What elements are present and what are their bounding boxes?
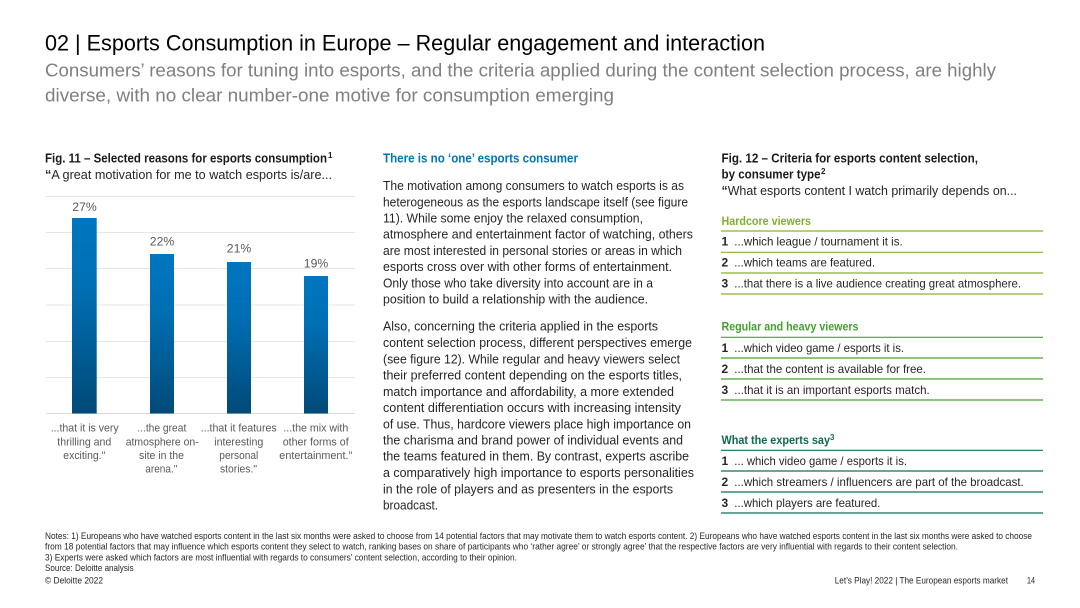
value labels: 19% [304,257,328,271]
figure 12 heading [722,151,1017,198]
bar: 19% [304,276,328,414]
figure 12 heading: Fig. 12 – Criteria for esports content selection, [722,151,978,165]
paragraph 2: match importance and affordability, a more extended [383,384,674,399]
list: what the experts say: 1 [722,454,728,468]
paragraph 1: atmosphere and entertainment factor of watching, others [383,227,693,242]
notes: from 18 potential factors that may influence which esports content they select to watch, ranking bases on share of participants who ‘rather agree’ or strongly agree’ that the respective factors are very influential with regards to their content selection. [45,541,958,552]
list: what the experts say: What the experts say [722,433,830,447]
list: hardcore viewers: 3 [722,277,728,291]
category label 3 [201,423,277,476]
category label 4: entertainment." [279,450,352,462]
footer report name: Let’s Play! 2022 | The European esports market [835,575,1008,586]
paragraph 2: (see figure 12). While regular and heavy viewers select [383,351,680,366]
list: regular and heavy viewers: ...which video game / esports it is. [734,341,904,355]
category label 2: atmosphere on- [126,436,199,448]
list: what the experts say: 3 [830,433,835,442]
list: regular and heavy viewers: ...that the content is available for free. [734,362,926,376]
value labels: 21% [227,242,251,256]
paragraph 1: The motivation among consumers to watch esports is as [383,178,684,193]
list: hardcore viewers: Hardcore viewers [722,214,811,228]
paragraph 2: the charisma and brand power of individual events and [383,433,683,448]
paragraph 2: the teams featured in them. By contrast, experts ascribe [383,449,689,464]
list: what the experts say: ...which streamers / influencers are part of the broadcast. [734,475,1024,489]
paragraph 2: Also, concerning the criteria applied in the esports [383,319,658,334]
paragraph 2: broadcast. [383,497,438,512]
category label 3: interesting [214,436,263,448]
figure 11 heading [45,151,333,182]
bar chart [46,196,355,476]
category label 3: stories." [220,464,257,476]
category label 4: other forms of [283,436,349,448]
list: hardcore viewers: ...that there is a live audience creating great atmosphere. [734,277,1021,291]
footer copyright: © Deloitte 2022 [45,575,103,586]
paragraph 1 [383,178,693,307]
figure 12 heading: “What esports content I watch primarily depends on... [722,184,1017,198]
figure 12 heading: 2 [821,167,826,176]
figure 12 heading: by consumer type [722,168,820,182]
paragraph 1: Only those who take diversity into account are in a [383,275,654,290]
value labels: 22% [150,234,174,248]
category label 4: ...the mix with [283,423,348,435]
category label 2 [126,423,199,476]
notes: 3) Experts were asked which factors are most influential with regards to consumers’ content selection, according to their opinion. [45,551,517,562]
bar: 27% [72,218,97,414]
category label 1 [51,423,119,462]
bar: 21% [227,262,251,414]
text heading: There is no ‘one’ esports consumer [383,152,578,166]
list: what the experts say: ... which video game / esports it is. [734,454,907,468]
paragraph 2: in the role of players and as presenters in the esports [383,481,673,496]
panel: explanatory text [383,152,694,512]
paragraph 2: of use. Thus, hardcore viewers place high importance on [383,416,691,431]
category label 1: ...that it is very [51,423,119,435]
paragraph 1: are most interested in personal stories or areas in which [383,243,682,258]
list: regular and heavy viewers [721,320,1043,400]
paragraph 2: a comparatively high importance to esports personalities [383,465,694,480]
figure 11 heading: “A great motivation for me to watch esports is/are... [45,168,332,182]
category label 4 [279,423,352,462]
list: regular and heavy viewers: 2 [722,362,728,376]
list: regular and heavy viewers: 1 [722,341,728,355]
subtitle [45,60,997,106]
paragraph 2: content selection process, different perspectives emerge [383,335,692,350]
category label 2: site in the [139,450,184,462]
list: hardcore viewers: 2 [722,256,728,270]
category label 2: ...the great [137,423,187,435]
value labels: 27% [72,200,97,214]
page number: 14 [1027,575,1035,586]
subtitle: diverse, with no clear number-one motive for consumption emerging [45,85,614,106]
paragraph 1: esports cross over with other forms of entertainment. [383,259,672,274]
panel: figure 11 reasons for consumption [45,151,355,476]
list: regular and heavy viewers: 3 [722,383,728,397]
figure 11 heading: 1 [328,151,333,160]
paragraph 2 [383,319,694,512]
paragraph 1: position to build a relationship with the audience. [383,292,648,307]
list: regular and heavy viewers: ...that it is an important esports match. [734,383,930,397]
paragraph 1: 11). While some enjoy the relaxed consumption, [383,210,643,225]
value labels [72,200,328,271]
bar: 22% [150,254,174,414]
panel: figure 12 criteria [721,151,1043,513]
list: what the experts say: ...which players are featured. [734,496,880,510]
category label 3: ...that it features [201,423,277,435]
category label 2: arena." [145,464,177,476]
paragraph 2: content differentiation occurs with increasing intensity [383,400,681,415]
notes: Source: Deloitte analysis [45,562,134,573]
list: what the experts say: 3 [722,496,728,510]
list: what the experts say: 2 [722,475,728,489]
category label 1: thrilling and [57,436,111,448]
category label 1: exciting." [63,450,105,462]
category label 3: personal [219,450,258,462]
list: hardcore viewers: ...which league / tournament it is. [734,235,903,249]
list: regular and heavy viewers: Regular and heavy viewers [722,320,859,334]
list: hardcore viewers: 1 [722,235,728,249]
paragraph 2: their preferred content depending on the esports titles, [383,368,682,383]
list: hardcore viewers [721,214,1043,294]
paragraph 1: heterogeneous as the esports landscape itself (see figure [383,194,688,209]
subtitle: Consumers’ reasons for tuning into esports, and the criteria applied during the content selection process, are highly [45,60,997,81]
notes [45,530,1032,573]
list: what the experts say [721,433,1043,513]
list: hardcore viewers: ...which teams are featured. [734,256,875,270]
figure 11 heading: Fig. 11 – Selected reasons for esports consumption [45,152,327,166]
title: 02 | Esports Consumption in Europe – Regular engagement and interaction [45,31,765,56]
